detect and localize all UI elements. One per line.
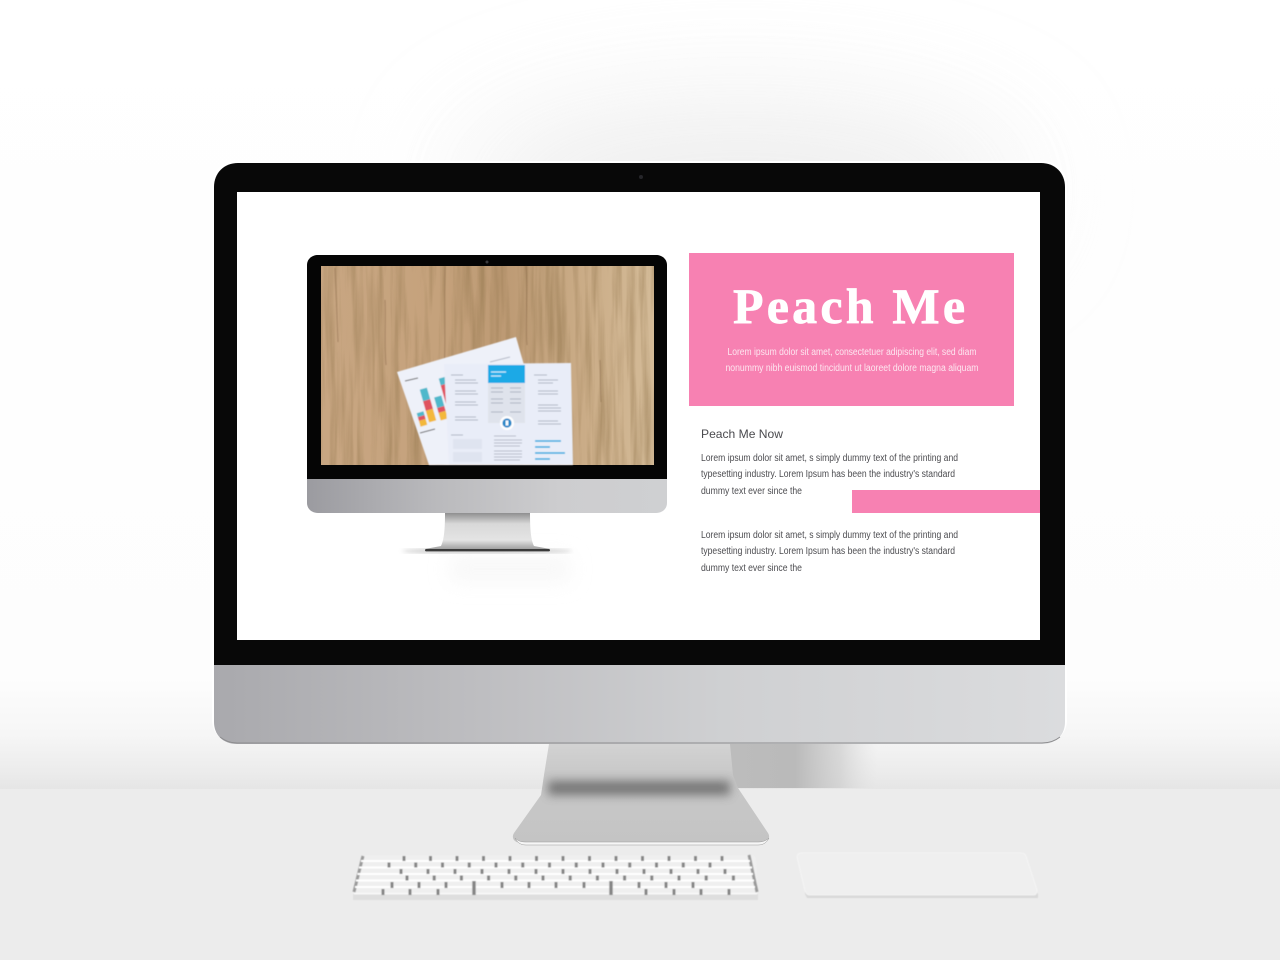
small monitor bezel	[307, 255, 667, 479]
large monitor	[214, 163, 1065, 845]
trackpad	[797, 853, 1038, 898]
key row highlights	[355, 861, 755, 887]
text block 2: Lorem ipsum dolor sit amet, s simply dummy text of the printing and	[701, 530, 958, 541]
background: desk surface	[0, 789, 1280, 960]
small monitor stand	[425, 513, 550, 551]
text block 1: Lorem ipsum dolor sit amet, s simply dummy text of the printing and	[701, 453, 958, 464]
stand base rim	[515, 838, 769, 845]
wood photo	[321, 266, 654, 465]
small webcam	[486, 260, 488, 264]
small monitor chin	[307, 478, 667, 513]
keyboard front highlight	[354, 893, 757, 894]
wall glow behind monitor top	[460, 105, 1020, 275]
stacked bars	[417, 377, 455, 427]
slide mockup: small monitor	[307, 255, 667, 582]
webcam	[639, 175, 643, 179]
text block 2	[701, 530, 958, 574]
header text lines	[491, 372, 506, 376]
grey column	[488, 383, 525, 423]
subtitle: Lorem ipsum dolor sit amet, consectetuer adipiscing elit, sed diam	[728, 347, 976, 358]
title: Peach Me	[733, 278, 968, 334]
monitor bezel	[214, 163, 1065, 665]
blue icon circle	[500, 416, 514, 430]
subtitle: nonummy nibh euismod tincidunt ut laoreet dolore magna aliquam	[726, 363, 978, 374]
text block 2: dummy text ever since the	[701, 563, 802, 574]
chart captions	[405, 378, 435, 433]
text block 1: dummy text ever since the	[701, 486, 802, 497]
resume documents	[397, 337, 573, 465]
text block 1: typesetting industry. Lorem Ipsum has been the industry's standard	[701, 469, 955, 480]
column text lines	[451, 375, 561, 435]
front sheet	[444, 363, 573, 465]
key separators	[383, 858, 735, 895]
small monitor reflection	[450, 556, 570, 582]
pink accent bar	[852, 490, 1040, 513]
text block 1	[701, 453, 958, 497]
monitor stand	[513, 744, 769, 845]
keyboard front edge	[353, 894, 758, 900]
text block 2: typesetting industry. Lorem Ipsum has been the industry's standard	[701, 546, 955, 557]
trackpad edge	[805, 890, 1038, 898]
small monitor shadow	[402, 548, 572, 554]
monitor chin	[214, 664, 1065, 744]
title panel	[689, 253, 1014, 406]
back sheet with chart	[397, 337, 534, 465]
keyboard side edges	[354, 855, 757, 892]
subtitle	[726, 347, 978, 374]
header marks	[490, 357, 510, 362]
profile text	[494, 436, 522, 460]
trackpad surface	[797, 853, 1037, 895]
keyboard body	[352, 855, 758, 899]
heading: Peach Me Now: Peach Me Now	[701, 427, 783, 441]
stand shadow on the wall	[728, 744, 878, 788]
blue header	[488, 365, 525, 383]
keyboard	[352, 855, 758, 900]
screen: slide background	[237, 192, 1040, 640]
reference boxes	[453, 439, 482, 462]
chin bottom edge	[220, 737, 1060, 743]
skill bars	[535, 441, 565, 459]
white halo around the monitor	[212, 161, 1067, 744]
